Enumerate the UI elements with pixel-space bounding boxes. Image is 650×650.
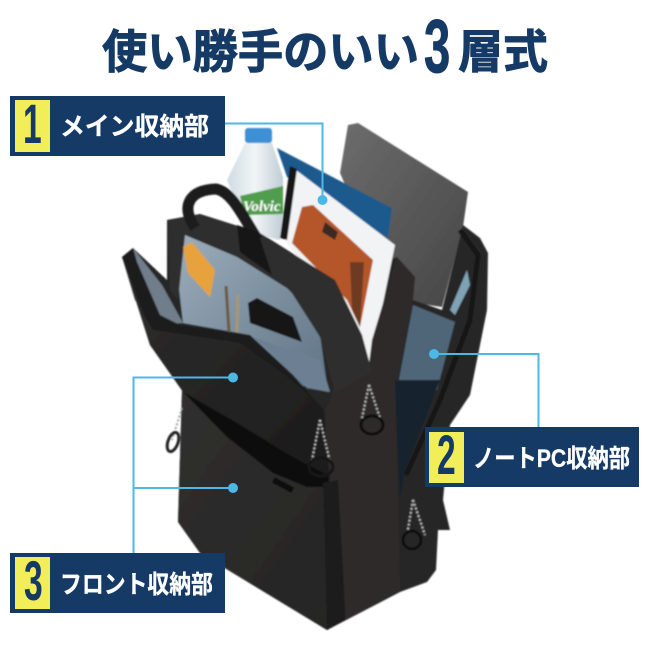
title: 使い勝手のいい	[102, 26, 419, 78]
blue folder	[277, 148, 392, 238]
water bottle	[227, 128, 283, 240]
label 3: front compartment	[10, 549, 225, 613]
gathered side strip	[323, 480, 345, 630]
white document with binder	[280, 166, 395, 367]
title: 層式	[458, 26, 548, 78]
backpack illustration	[122, 123, 488, 630]
lower silk lining	[253, 337, 330, 392]
brand tag	[272, 477, 294, 493]
main compartment zip band	[167, 214, 372, 392]
zipper pulls	[165, 385, 425, 549]
label 1: main compartment	[10, 92, 225, 156]
label 2: notebook PC compartment	[425, 423, 639, 487]
orange notebook	[292, 205, 373, 327]
title: 3	[424, 5, 450, 89]
front flap rim	[122, 248, 324, 420]
label 2: notebook PC compartment: 2	[437, 423, 456, 486]
bag silhouette	[122, 214, 488, 630]
title	[102, 5, 548, 89]
pens	[226, 286, 238, 332]
water bottle: Volvic	[243, 199, 281, 215]
front pocket zip shadow	[183, 392, 330, 487]
label 3: front compartment: 3	[24, 549, 43, 612]
center side panel	[323, 257, 415, 630]
open front flap lining	[122, 248, 183, 325]
smartphone	[248, 298, 302, 342]
lower front panel	[178, 390, 345, 630]
front compartment lining	[172, 227, 328, 392]
carry handle	[188, 189, 272, 275]
front flap panel	[122, 257, 330, 480]
laptop	[340, 123, 468, 307]
laptop pocket lining	[395, 270, 470, 500]
label 1: main compartment: メイン収納部	[60, 113, 209, 141]
label 1: main compartment: 1	[23, 92, 42, 155]
leader line 2	[429, 349, 538, 427]
label 3: front compartment: フロント収納部	[60, 571, 213, 599]
leader line 3	[134, 372, 238, 553]
right zip edge	[406, 230, 478, 475]
leader line 1	[225, 124, 328, 205]
orange box in pocket	[183, 242, 215, 297]
